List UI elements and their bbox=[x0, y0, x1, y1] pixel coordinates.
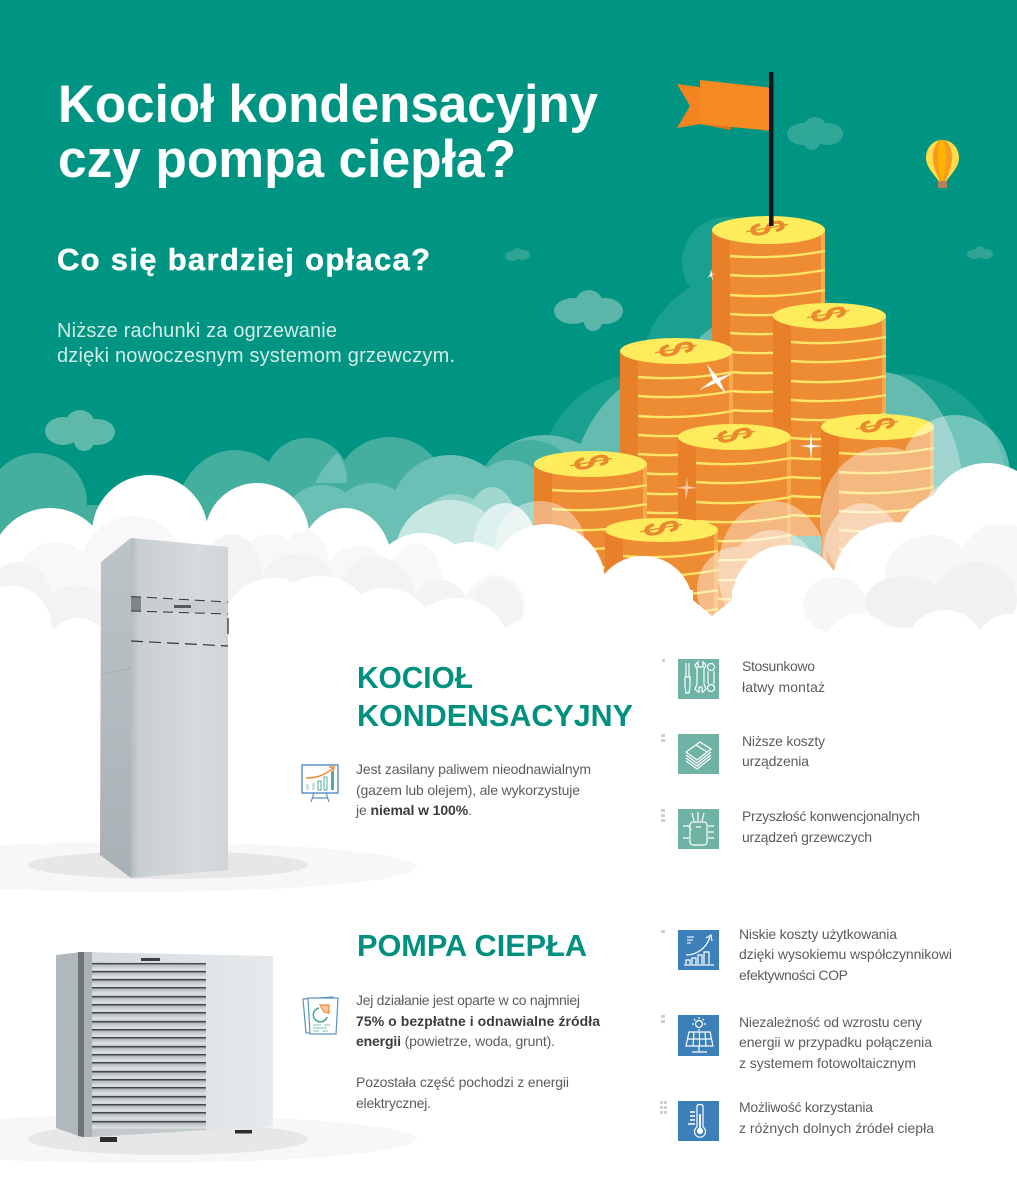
list item: solar independence bbox=[661, 1014, 932, 1071]
coin stack 7 (front) bbox=[605, 517, 718, 640]
heat pump description: Jej działanie jest oparte w co najmniej bbox=[356, 992, 580, 1008]
icon: orange flag on pole bbox=[677, 72, 774, 226]
grey cloud shading right bbox=[803, 523, 1017, 633]
clouds behind the coins: light layer bbox=[473, 318, 964, 637]
list item: solar independence: energii w przypadku połączenia bbox=[739, 1034, 932, 1050]
coin stack 2 (right back): $ bbox=[798, 303, 858, 325]
coin stack 5 (right front) bbox=[821, 414, 934, 627]
grey cloud shading left darker bbox=[0, 534, 523, 653]
grey cloud shading right darker bbox=[865, 562, 1017, 638]
list item: future of conventional devices: Przyszłość konwencjonalnych bbox=[742, 808, 920, 824]
small cloud top bbox=[787, 117, 843, 150]
list item: solar independence: z systemem fotowoltaicznym bbox=[739, 1055, 916, 1071]
heading: KOCIOŁ KONDENSACYJNY: KONDENSACYJNY bbox=[357, 698, 633, 733]
small cloud left bbox=[45, 410, 115, 451]
background: teal sky bbox=[0, 0, 1017, 640]
small cloud middle bbox=[554, 290, 623, 331]
coin stack 4 (centre) bbox=[678, 424, 791, 637]
title bbox=[58, 75, 599, 189]
heat pump description: 75% o bezpłatne i odnawialne źródła bbox=[356, 1013, 600, 1029]
coin stack 2 (right back) bbox=[773, 303, 886, 536]
list item: low operating costs: efektywności COP bbox=[739, 967, 848, 983]
clouds behind the coins: dark layer bbox=[537, 217, 1007, 606]
heat pump description bbox=[356, 992, 600, 1111]
heat pump description: energii (powietrze, woda, grunt). bbox=[356, 1033, 555, 1049]
icon: report with pie chart bbox=[303, 997, 338, 1034]
sparkles on coins bbox=[676, 269, 823, 500]
list item: future of conventional devices bbox=[661, 808, 920, 849]
boiler description bbox=[355, 761, 591, 818]
subtitle question: Co się bardziej opłaca? bbox=[57, 242, 430, 277]
list item: low operating costs bbox=[661, 926, 952, 983]
coin stack 7 (front): $ bbox=[631, 517, 691, 539]
tiny cloud centre bbox=[505, 248, 530, 261]
horizon clouds: mid teal bbox=[282, 453, 552, 575]
list item: easy installation: łatwy montaż bbox=[742, 679, 825, 695]
list item: lower heat sources bbox=[660, 1099, 934, 1141]
list item: lower device cost: urządzenia bbox=[742, 753, 809, 769]
white foreground clouds bbox=[0, 463, 1017, 656]
intro text bbox=[57, 320, 455, 367]
heat pump description: elektrycznej. bbox=[356, 1095, 431, 1111]
boiler description: Jest zasilany paliwem nieodnawialnym bbox=[356, 761, 591, 777]
list item: lower heat sources: z różnych dolnych źródeł ciepła bbox=[739, 1120, 934, 1136]
coin stack 1 (tallest) bbox=[712, 216, 825, 430]
list item: easy installation bbox=[662, 658, 825, 699]
tiny cloud right bbox=[967, 246, 993, 259]
list item: lower heat sources: Możliwość korzystania bbox=[739, 1099, 873, 1115]
intro text: Niższe rachunki za ogrzewanie bbox=[57, 320, 337, 342]
coin stack 6 (left front): $ bbox=[561, 451, 621, 473]
coin stacks bbox=[534, 216, 934, 640]
intro text: dzięki nowoczesnym systemom grzewczym. bbox=[57, 345, 455, 367]
coin stack 1 (tallest): $ bbox=[737, 217, 797, 239]
heading: KOCIOŁ KONDENSACYJNY: KOCIOŁ bbox=[357, 660, 473, 695]
heat pump description: Pozostała część pochodzi z energii bbox=[356, 1074, 569, 1090]
horizon clouds: pale teal bbox=[395, 487, 537, 610]
title: czy pompa ciepła? bbox=[58, 130, 516, 189]
boiler description: je niemal w 100%. bbox=[355, 802, 472, 818]
list item: low operating costs: dzięki wysokiemu współczynnikowi bbox=[739, 946, 952, 962]
heat pump shadow bbox=[0, 1115, 417, 1163]
heading: POMPA CIEPŁA: POMPA CIEPŁA bbox=[357, 928, 587, 963]
boiler image bbox=[100, 538, 229, 878]
boiler description: (gazem lub olejem), ale wykorzystuje bbox=[356, 782, 580, 798]
icon: presentation chart bbox=[302, 765, 338, 802]
list item: low operating costs: Niskie koszty użytkowania bbox=[739, 926, 897, 942]
list item: future of conventional devices: urządzeń grzewczych bbox=[742, 829, 872, 845]
list item: solar independence: Niezależność od wzrostu ceny bbox=[739, 1014, 922, 1030]
coin stack 3 (left back): $ bbox=[646, 338, 706, 360]
coin stack 3 (left back) bbox=[620, 338, 733, 571]
translucent clouds over the coins bbox=[495, 415, 1010, 639]
title: Kocioł kondensacyjny bbox=[58, 75, 599, 134]
boiler shadow bbox=[0, 842, 417, 892]
list item: lower device cost: Niższe koszty bbox=[742, 733, 825, 749]
coin stack 5 (right front): $ bbox=[847, 414, 907, 436]
list item: easy installation: Stosunkowo bbox=[742, 658, 815, 674]
coin stack 4 (centre): $ bbox=[704, 424, 764, 446]
icon: hot air balloon bbox=[926, 140, 959, 188]
translucent clouds lower bbox=[697, 480, 1000, 650]
white base clouds bbox=[0, 576, 1017, 1200]
grey cloud shading left bbox=[17, 516, 525, 635]
coin stack 6 (left front) bbox=[534, 451, 647, 594]
horizon clouds far left: teal bbox=[0, 437, 580, 590]
heading: KOCIOŁ KONDENSACYJNY bbox=[357, 660, 633, 733]
list item: lower device cost bbox=[661, 733, 825, 774]
heat pump image bbox=[56, 952, 273, 1142]
